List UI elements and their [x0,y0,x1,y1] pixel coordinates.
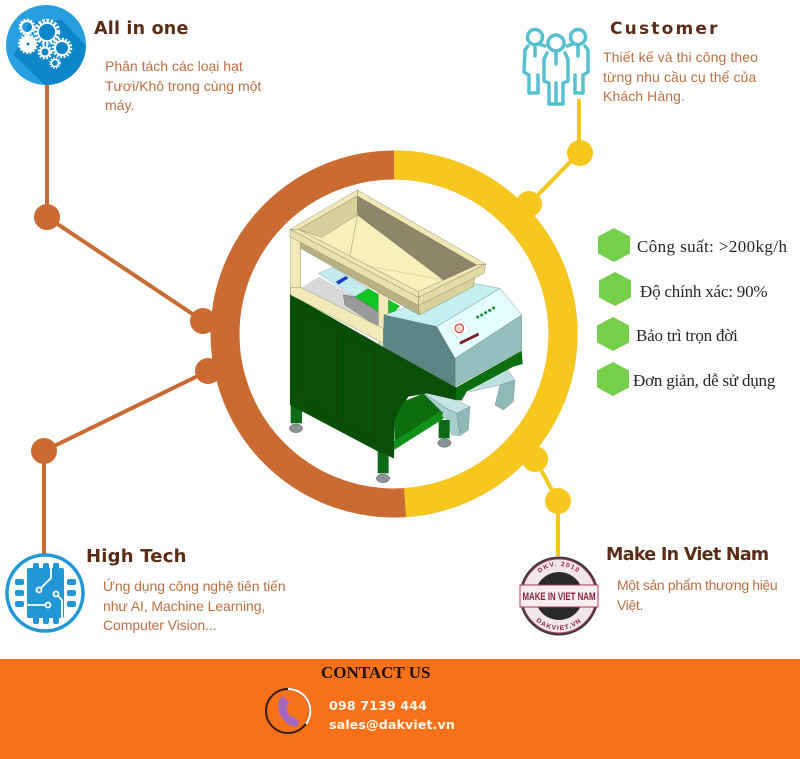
text: contact details: 098 7139 444 [329,699,427,714]
machine: outlet chutes [422,368,515,436]
ring [225,165,563,503]
heading: All in one: All in one [94,19,189,39]
icon: circuit chip [7,555,83,631]
text: contact details: sales@dakviet.vn [329,718,455,733]
icon: Make in Viet Nam stamp: MAKE IN VIET NAM [522,591,596,603]
text: Customer: Khách Hàng. [603,88,685,104]
machine: green base [290,294,456,458]
icon: gears [6,5,86,85]
text: Make In Viet Nam: Một sản phẩm thương hiệu [617,577,777,593]
heading: Customer: Customer [610,19,720,39]
icon: Make in Viet Nam stamp [520,556,598,636]
heading: High Tech: High Tech [86,546,187,567]
text: High Tech: Ứng dụng công nghệ tiên tiến [103,578,286,594]
spec: maintenance: Bảo trì trọn đời [636,326,738,345]
machine: cabinet doors [298,308,375,442]
text: Customer: Thiết kế và thi công theo [603,49,758,65]
machine: indicator lights [476,306,495,318]
connector: High Tech [31,358,221,555]
machine: cream frame [291,230,388,347]
machine: grey deck and sorter [302,277,383,337]
connector: Make In Viet Nam [522,446,571,556]
icon: phone [266,689,310,733]
spec: capacity: Công suất: >200kg/h [637,237,787,256]
text: contact details [329,699,455,733]
text: Customer: từng nhu cầu cụ thể của [603,68,756,84]
machine: logo [449,319,479,345]
text: All in one: Phân tách các loại hạt [105,58,243,74]
spec: ease of use: Đơn giản, dễ sử dụng [633,371,775,390]
contact band [0,659,800,759]
heading: Make In Viet Nam: Make In Viet Nam [606,545,768,565]
text: Customer [603,49,758,104]
text: High Tech: Computer Vision... [103,617,216,633]
icon: customers [524,30,588,104]
text: All in one: máy. [105,97,134,113]
text: Make In Viet Nam [617,577,777,612]
text: All in one [105,58,262,113]
text: High Tech: như AI, Machine Learning, [103,598,265,614]
spec: accuracy: Độ chính xác: 90% [640,282,767,301]
text: High Tech [103,578,286,633]
machine: hopper [290,190,486,315]
connector: All in one [34,80,216,334]
machine: hood [383,283,522,387]
icon: Make in Viet Nam stamp: DKV. 2010 [537,562,580,573]
connector: Customer [516,99,593,217]
icon: green hexagons [597,228,631,396]
text: Make In Viet Nam: Việt. [617,596,643,612]
icon: Make in Viet Nam stamp: DAKVIET.VN [536,618,581,630]
machine illustration [289,190,523,483]
machine: legs and feet [289,403,451,483]
heading: contact us: CONTACT US [321,663,430,682]
text: All in one: Tươi/Khô trong cùng một [105,78,261,94]
